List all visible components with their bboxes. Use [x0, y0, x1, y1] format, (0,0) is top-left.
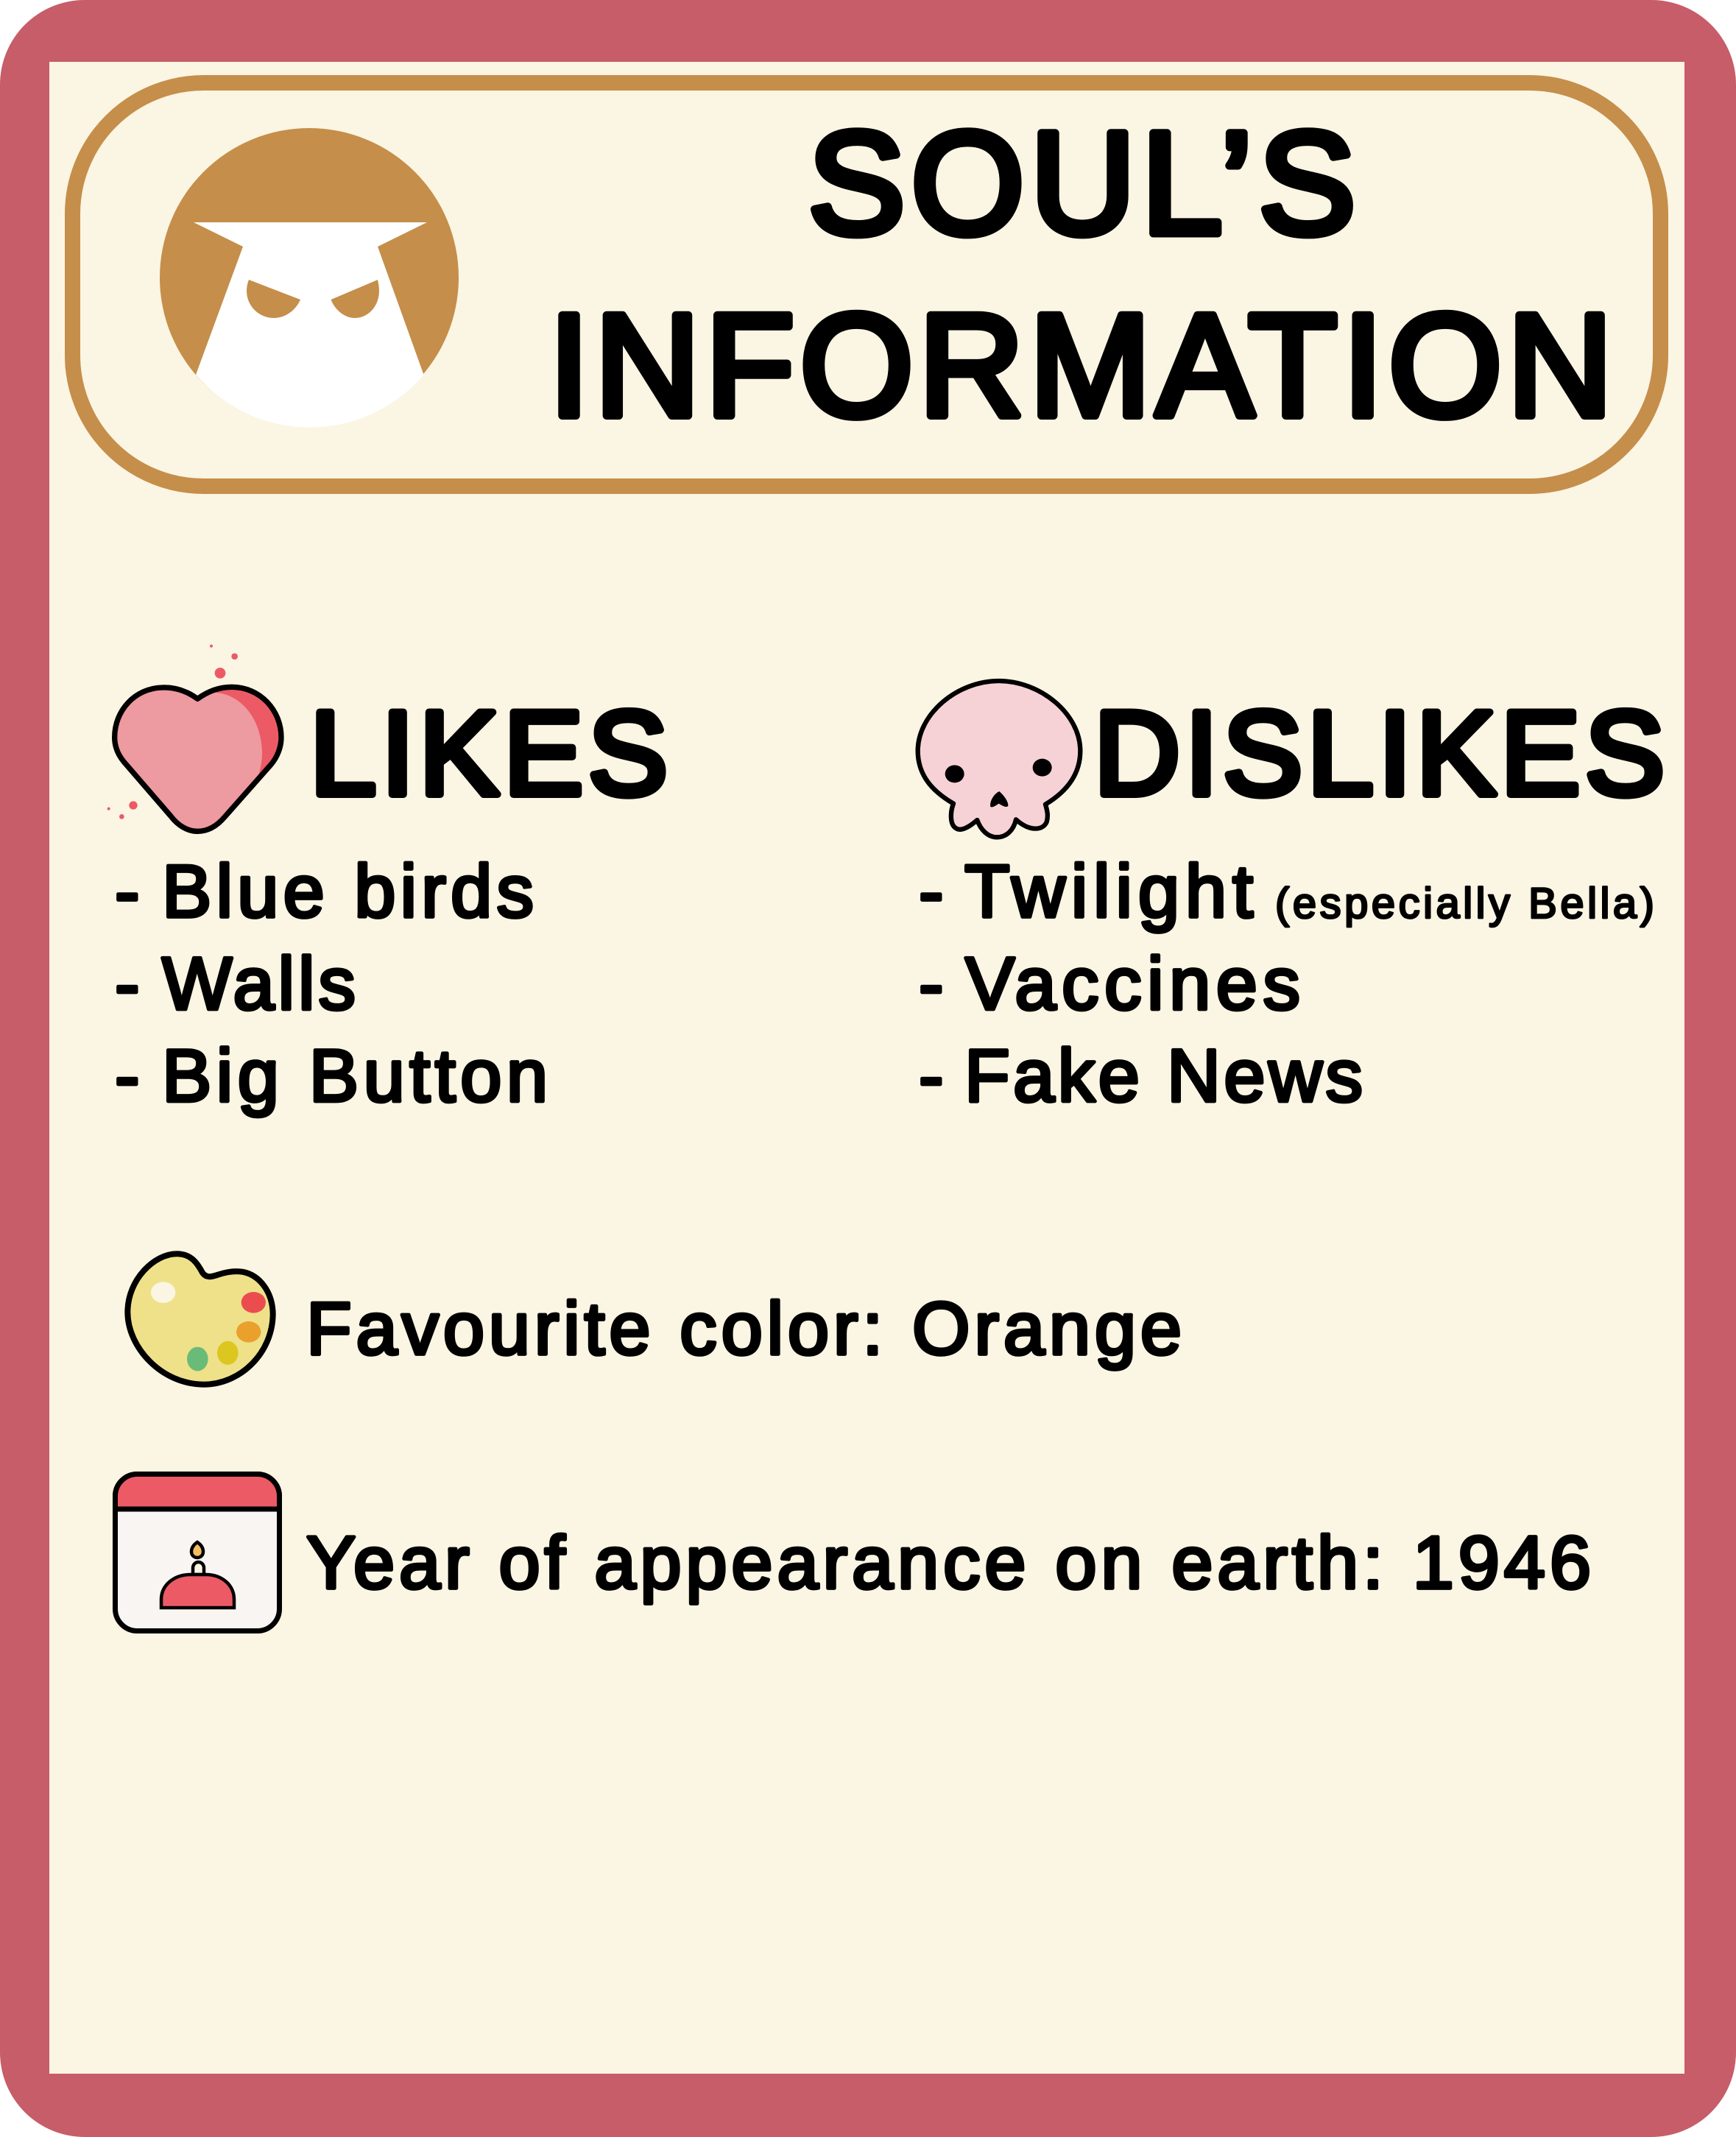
list: dislikes items: (especially Bella): [1275, 880, 1654, 928]
list: dislikes items: -: [919, 1035, 944, 1117]
panel: header: [72, 82, 1661, 486]
header rounded border: [72, 82, 1661, 486]
list: likes items: [115, 851, 548, 1117]
title: [549, 102, 1612, 446]
list: likes items: -: [115, 851, 140, 933]
list: likes items: -: [115, 1035, 140, 1117]
panel: likes: [107, 645, 668, 1117]
icon: birthday calendar: [115, 1474, 280, 1631]
heading: dislikes: DISLIKES: [1094, 687, 1665, 820]
heading: likes: LIKES: [310, 687, 668, 820]
list: dislikes items: -: [919, 943, 944, 1025]
list: dislikes items: Fake News: [964, 1035, 1363, 1117]
text: year of appearance: Year of appearance on earth: 1946: [306, 1522, 1591, 1605]
icon: skull: [918, 681, 1080, 837]
title: INFORMATION: [549, 284, 1612, 446]
icon: palette: [127, 1254, 273, 1385]
list: dislikes items: [919, 851, 1654, 1117]
panel: favourite color: [127, 1254, 1182, 1385]
title: SOUL’S: [808, 102, 1356, 264]
panel: year of appearance: [115, 1474, 1591, 1631]
list: likes items: Walls: [162, 943, 356, 1025]
list: dislikes items: Vaccines: [965, 943, 1300, 1025]
panel: dislikes: [918, 681, 1665, 1117]
icon: hooded soul avatar: [160, 128, 459, 428]
list: likes items: Blue birds: [162, 851, 534, 933]
text: favourite color: Favourite color: Orange: [306, 1288, 1182, 1371]
list: dislikes items: -: [919, 851, 944, 933]
list: dislikes items: Twilight: [964, 851, 1253, 933]
list: likes items: Big Button: [162, 1035, 548, 1117]
icon: heart: [107, 645, 281, 831]
list: likes items: -: [115, 943, 140, 1025]
